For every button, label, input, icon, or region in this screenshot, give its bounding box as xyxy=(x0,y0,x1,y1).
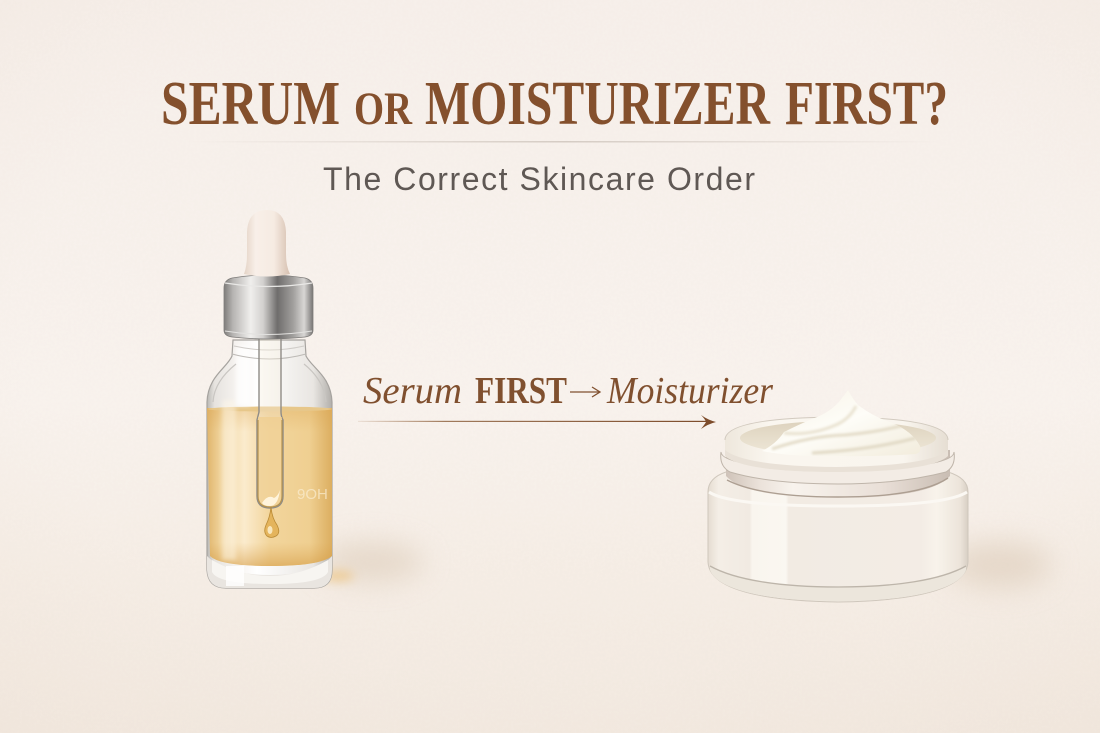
callout: serum first then moisturizer: Serum xyxy=(363,370,462,412)
title: MOISTURIZER xyxy=(425,70,771,138)
bottle shadow xyxy=(320,542,424,582)
jar rim xyxy=(725,417,948,472)
icon: cream jar xyxy=(708,390,968,602)
droplet xyxy=(265,507,279,538)
faint label: 9OH xyxy=(297,486,328,503)
pipette xyxy=(257,338,283,508)
title: SERUM xyxy=(161,70,340,138)
jar neck and thread xyxy=(726,450,950,498)
bottle glass xyxy=(207,340,332,588)
callout: serum first then moisturizer: FIRST xyxy=(475,370,567,412)
metal collar xyxy=(224,275,313,339)
serum liquid xyxy=(207,346,332,590)
title xyxy=(161,70,948,138)
callout: serum first then moisturizer: Moisturizer xyxy=(606,370,773,412)
title: OR xyxy=(354,83,413,135)
jar opening xyxy=(740,421,936,455)
callout: serum first then moisturizer xyxy=(363,370,773,412)
arrow: serum to moisturizer xyxy=(358,415,716,429)
title: FIRST? xyxy=(785,70,948,138)
rubber bulb xyxy=(244,210,290,276)
jar shadow xyxy=(948,541,1052,589)
cream swirl xyxy=(762,390,920,456)
title divider xyxy=(190,141,940,142)
jar body xyxy=(708,472,968,602)
icon: serum dropper bottle xyxy=(207,210,332,590)
subtitle: The Correct Skincare Order xyxy=(323,161,755,197)
